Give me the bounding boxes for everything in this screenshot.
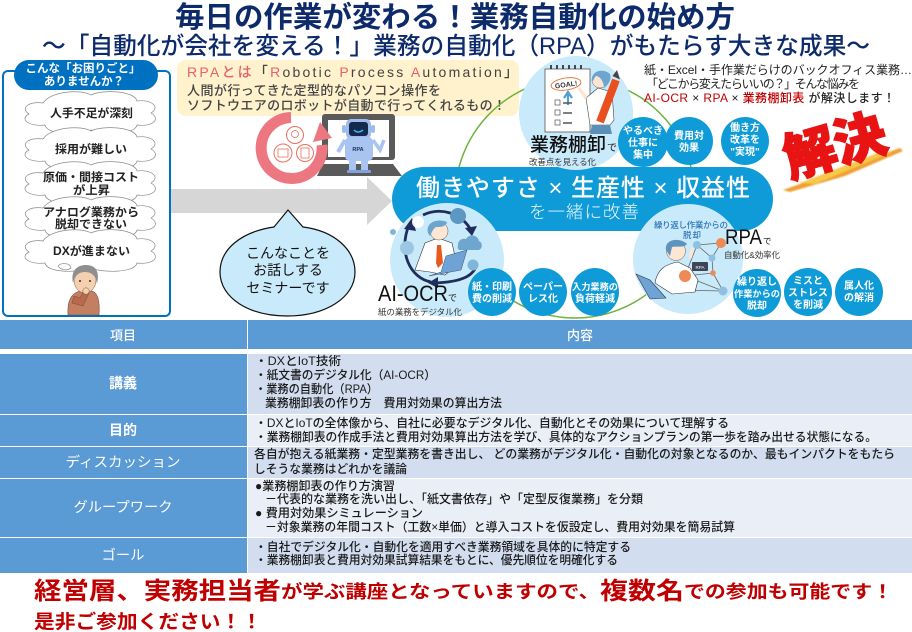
panel: AI-OCR: 紙の業務をデジタル化: [378, 307, 462, 317]
RPA definition box: [177, 60, 519, 116]
closing message: 複数名: [600, 578, 684, 605]
benefit: mistakes: [784, 268, 832, 316]
troubles header pill: こんな「お困りごと」: [26, 61, 140, 75]
table header: 項目: [110, 328, 136, 343]
panel: AI-OCR: AI-OCR: [378, 281, 448, 306]
central pill: 働きやすさ × 生産性 × 収益性: [416, 175, 750, 202]
cloud: analog: アナログ業務から: [43, 205, 139, 219]
benefit: cost effectiveness: 費用対: [674, 129, 704, 142]
benefit: repetitive work: [733, 269, 781, 317]
benefit: mistakes: を削減: [793, 298, 823, 311]
row: goal: ・業務棚卸表と費用対効果試算結果をもとに、優先順位を明確化する: [255, 552, 618, 567]
benefit: focus: 仕事に: [628, 136, 658, 149]
cloud: analog: [25, 197, 155, 238]
icon: person with laptop: [415, 220, 467, 276]
panel: troubles: [3, 60, 170, 316]
panel: RPA: で: [763, 236, 772, 246]
row: goal: ・自社でデジタル化・自動化を適用すべき業務領域を具体的に特定する: [255, 539, 631, 554]
RPA definition box: ソフトウエアのロボットが自動で行ってくれるもの！: [187, 98, 506, 113]
closing message: [34, 578, 893, 632]
top right message: [644, 63, 912, 105]
benefit: focus: [618, 117, 668, 167]
benefit: de-personalise: [835, 268, 883, 316]
benefit: work style: "実現": [730, 145, 760, 158]
cloud: hiring: 採用が難しい: [55, 142, 127, 156]
troubles header pill: ありませんか？: [44, 75, 124, 88]
row: discussion: [0, 446, 912, 478]
row: discussion: しそうな業務はどれかを議論: [254, 461, 407, 476]
benefit: paperless: レス化: [528, 292, 558, 305]
row: goal: ゴール: [102, 547, 144, 563]
cloud: cost: 原価・間接コスト: [43, 170, 139, 184]
benefit: cost effectiveness: [665, 117, 713, 165]
icon: network: [675, 238, 728, 296]
grey arrow: [10, 177, 392, 225]
benefit: input load: 負荷軽減: [575, 292, 615, 305]
top right message: 「どこから変えたらいいの？」そんな悩みを: [646, 76, 860, 91]
benefit: repetitive work: 繰り返し: [737, 275, 777, 288]
troubles header pill: [14, 60, 158, 90]
panel: business inventory: 業務棚卸: [530, 134, 606, 156]
benefit: paperless: ペーパー: [523, 281, 563, 293]
panel: RPA: 自動化&効率化: [724, 250, 780, 260]
row: lecture: ・紙文書のデジタル化（AI-OCR）: [255, 367, 436, 382]
icon: person with pencil: [579, 70, 620, 134]
row: group work: －代表的な業務を洗い出し、「紙文書依存」や「定型反復業務」を分類: [265, 491, 643, 506]
row: discussion: ディスカッション: [66, 454, 180, 470]
closing message: が学ぶ講座となっていますので、: [281, 581, 600, 602]
icon: RPA laptop and robot: [317, 114, 402, 176]
row: group work: －対象業務の年間コスト（工数×単価）と導入コストを仮設定し、費用対効果を簡易試算: [265, 519, 735, 534]
row: lecture: 講義: [109, 375, 137, 391]
benefit: work style: 改革を: [730, 133, 760, 146]
panel: AI-OCR: で: [448, 293, 457, 303]
table header: 内容: [567, 328, 593, 343]
RPA definition box: RPAとは「Robotic Process Automation」: [187, 64, 518, 80]
benefit: paper cost: 費の削減: [472, 292, 512, 305]
top right message: 紙・Excel・手作業だらけのバックオフィス業務…: [644, 63, 912, 77]
row: goal: [0, 538, 912, 573]
robot: RPA: [352, 147, 364, 153]
title: 毎日の作業が変わる！業務自動化の始め方: [175, 0, 735, 34]
row: lecture: ・DXとIoT技術: [255, 353, 341, 368]
row: group work: グループワーク: [74, 499, 172, 515]
icon: person with laptop: [636, 240, 708, 299]
row: lecture: [0, 353, 912, 414]
benefit: input load: 入力業務の: [572, 281, 618, 292]
row: lecture: 業務棚卸表の作り方 費用対効果の算出方法: [265, 395, 502, 410]
solved stamp: 解決: [777, 105, 893, 190]
benefit: repetitive work: 作業からの: [734, 288, 780, 299]
panel: business inventory: [519, 56, 633, 170]
panel: AI-OCR: [378, 203, 504, 317]
panel: RPA: [633, 204, 780, 314]
RPA definition box: 人間が行ってきた定型的なパソコン操作を: [187, 83, 441, 98]
row: lecture: ・業務の自動化（RPA）: [255, 381, 378, 396]
benefit: input load: [571, 268, 619, 316]
cloud: DX: DXが進まない: [53, 244, 130, 258]
benefit: de-personalise: 属人化: [844, 279, 874, 292]
cloud: DX: [25, 230, 155, 271]
closing message: での参加も可能です！: [684, 582, 893, 602]
row: purpose: 目的: [109, 422, 137, 438]
cloud: hiring: [25, 128, 155, 169]
cloud: cost: [25, 162, 155, 203]
benefit circles: inventory: [618, 117, 769, 167]
speech bubble: [220, 210, 355, 316]
benefit: paperless: [519, 268, 567, 316]
benefit: cost effectiveness: 効果: [679, 141, 699, 154]
panel: business inventory: 改善点を見える化: [529, 157, 596, 167]
benefit: focus: 集中: [633, 148, 653, 161]
benefit: de-personalise: の解消: [844, 291, 874, 304]
benefit: work style: [721, 117, 769, 165]
benefit: mistakes: ミスと: [793, 275, 823, 287]
central pill: [392, 167, 773, 231]
row: group work: ● 費用対効果シミュレーション: [255, 505, 423, 520]
cloud: labour shortage: [25, 92, 155, 133]
green link circle: [455, 78, 695, 318]
cloud: cost: が上昇: [73, 183, 111, 197]
row: group work: ●業務棚卸表の作り方演習: [255, 478, 395, 493]
icon: cycle arrows: [404, 211, 477, 288]
icon: automation cycle ring: [261, 118, 332, 178]
benefit circles: RPA: [733, 268, 883, 317]
benefit: focus: やるべき: [623, 125, 663, 137]
row: purpose: ・業務棚卸表の作成手法と費用対効果算出方法を学び、具体的なアクションプランの第一歩を踏み出せる状態になる。: [255, 429, 877, 444]
benefit: paper cost: 紙・印刷: [472, 280, 512, 293]
cloud: labour shortage: 人手不足が深刻: [50, 106, 133, 120]
panel: RPA: 繰り返し作業からの: [654, 220, 728, 230]
speech bubble: セミナーです: [246, 280, 330, 296]
row: purpose: [0, 415, 912, 446]
row: group work: [0, 478, 912, 537]
row: discussion: 各自が抱える紙業務・定型業務を書き出し、 どの業務がデジタル化・自動化の対象となるのか、最もインパクトをもたら: [254, 446, 895, 461]
top right message: AI-OCR × RPA × 業務棚卸表 が解決します！: [644, 90, 895, 105]
table header: [0, 320, 912, 349]
speech bubble: こんなことを: [246, 245, 330, 261]
panel: RPA: RPA: [725, 226, 762, 249]
subtitle: ～「自動化が会社を変える！」業務の自動化（RPA）がもたらす大きな成果～: [42, 33, 870, 60]
benefit: work style: 働き方: [730, 121, 760, 134]
closing message: 経営層、実務担当者: [34, 578, 281, 605]
row: purpose: ・DXとIoTの全体像から、自社に必要なデジタル化、自動化とその効果について理解する: [255, 415, 729, 430]
icon: person with laptop: RPA: [696, 265, 704, 270]
cloud: analog: 脱却できない: [55, 217, 127, 231]
benefit: repetitive work: 脱却: [747, 299, 767, 312]
panel: RPA: 脱却: [683, 230, 701, 240]
icon: checklist note: GOAL!: [555, 80, 578, 91]
speech bubble: お話しする: [253, 262, 323, 278]
central pill: を一緒に改善: [529, 202, 639, 222]
schedule table: [0, 320, 912, 573]
benefit: paper cost: [468, 268, 516, 316]
benefit: mistakes: ストレス: [788, 287, 828, 299]
icon: worried man: [58, 264, 99, 315]
panel: business inventory: で: [607, 143, 617, 154]
benefit circles: AI-OCR: [468, 268, 619, 316]
